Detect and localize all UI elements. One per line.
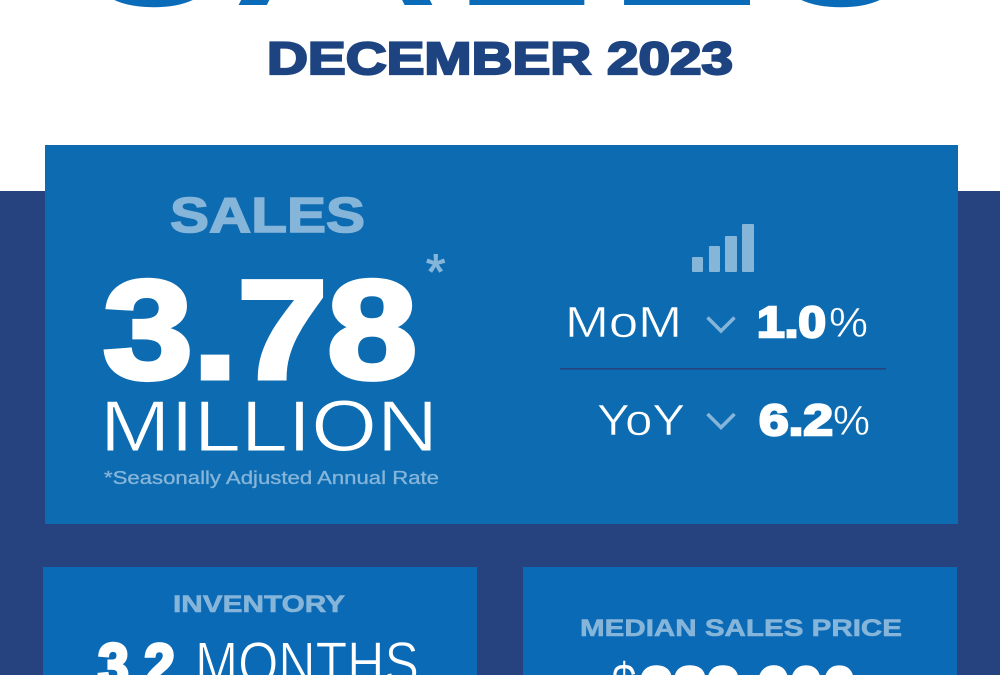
footnote: *Seasonally Adjusted Annual Rate bbox=[104, 468, 439, 488]
sales heading: SALES bbox=[170, 189, 365, 243]
sales figure: 3.78 bbox=[103, 251, 417, 408]
inventory heading: INVENTORY bbox=[173, 591, 345, 618]
panel: sales bbox=[45, 145, 958, 524]
year over year row bbox=[597, 396, 870, 445]
year over year row: % bbox=[833, 397, 870, 444]
month over month row: 1.0 bbox=[757, 298, 826, 347]
asterisk: * bbox=[426, 244, 445, 300]
panel: median sales price bbox=[523, 567, 957, 675]
year over year row: 6.2 bbox=[759, 396, 833, 445]
median price heading: MEDIAN SALES PRICE bbox=[580, 615, 902, 642]
icon: bar chart bbox=[692, 224, 754, 272]
month over month row: MoM bbox=[565, 298, 682, 347]
million label: MILLION bbox=[100, 387, 438, 467]
year over year row: YoY bbox=[597, 396, 685, 445]
subtitle: December 2023: DECEMBER 2023 bbox=[267, 33, 733, 84]
icon: down chevron bbox=[708, 414, 734, 428]
month over month row: % bbox=[829, 299, 868, 346]
month over month row bbox=[565, 298, 868, 347]
panel: inventory bbox=[43, 567, 477, 675]
title: SALES (clipped at top edge) bbox=[78, 0, 915, 54]
icon: down chevron bbox=[708, 318, 734, 331]
